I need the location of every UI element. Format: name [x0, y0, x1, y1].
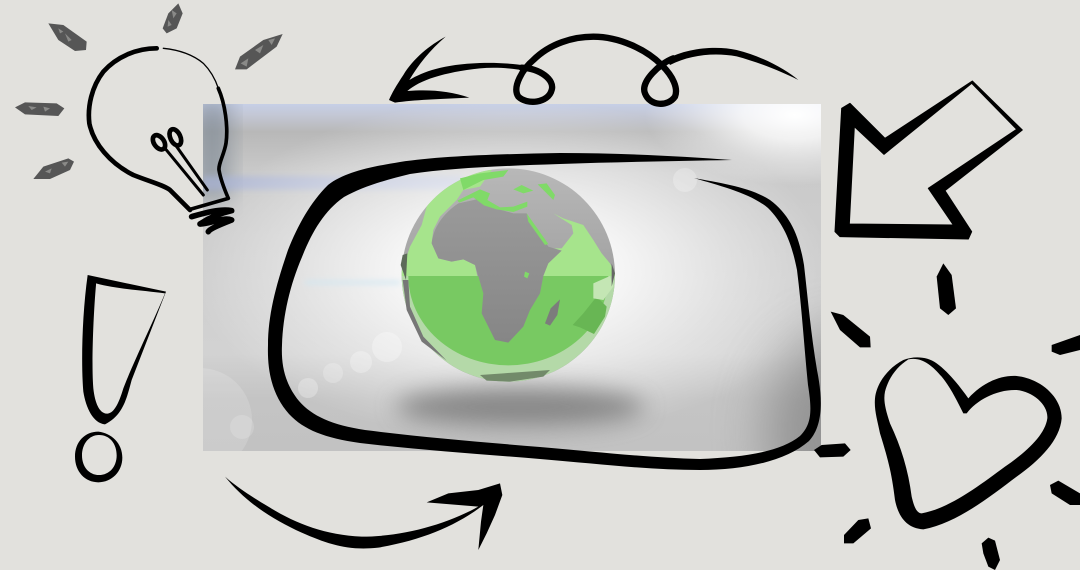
ocean: lower hemisphere: [402, 276, 615, 382]
icon: lightbulb: [89, 48, 232, 232]
icon: heart: [875, 357, 1062, 529]
arrow: looping arrow at top: [389, 37, 798, 104]
arrow: curved arrow at bottom: [225, 477, 502, 550]
icon: outlined arrow pointing down-left: [835, 81, 1022, 239]
Africa: [432, 199, 562, 343]
seas: Mediterranean and small patches: [457, 170, 555, 278]
right edge highlight: [593, 276, 613, 300]
speech-bubble outline: [268, 153, 821, 470]
bulb outline: [89, 48, 228, 210]
icon: heart rays: [814, 263, 1080, 570]
ocean: upper left: [400, 170, 492, 276]
icon: exclamation mark: [75, 275, 166, 482]
globe drop shadow: [395, 387, 645, 427]
lens flares: [148, 168, 697, 472]
Australia: [573, 297, 607, 334]
icon: light rays: [15, 3, 283, 179]
filament: [150, 127, 207, 195]
edge slivers: [401, 253, 615, 382]
globe: [397, 168, 623, 389]
screw base: [192, 210, 232, 232]
panel: photo background: [203, 104, 821, 451]
ocean: upper right: [543, 213, 617, 276]
Madagascar: [545, 299, 560, 326]
